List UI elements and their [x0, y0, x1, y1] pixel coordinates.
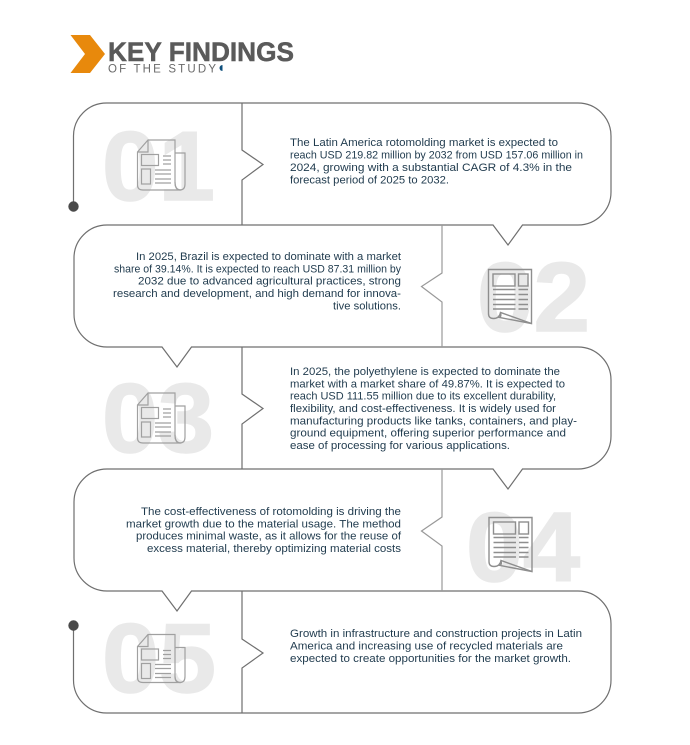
text block: finding 2: tive solutions.: [333, 300, 401, 312]
text block: finding 1: [290, 137, 583, 186]
icon: document 5: [138, 634, 185, 682]
icon: document 1: [138, 140, 185, 190]
text block: finding 4: produces minimal waste, as it allows for the reuse of: [136, 531, 402, 543]
number 01: 01: [102, 111, 215, 221]
text block: finding 2: 2032 due to advanced agricultural practices, strong: [138, 276, 401, 288]
text block: finding 4: [126, 506, 402, 555]
text block: finding 2: research and development, and high demand for innova-: [113, 288, 401, 300]
text block: finding 3: In 2025, the polyethylene is expected to dominate the: [290, 366, 560, 378]
text block: finding 4: The cost-effectiveness of rotomolding is driving the: [141, 506, 401, 518]
number 02: 02: [477, 242, 590, 352]
text block: finding 3: [290, 366, 577, 452]
serpentine outline: [74, 103, 611, 713]
text block: finding 3: reach USD 111.55 million due to its excellent durability,: [290, 391, 556, 403]
text block: finding 3: ease of processing for various applications.: [290, 440, 510, 452]
text block: finding 3: flexibility, and cost-effectiveness. It is widely used for: [290, 403, 556, 415]
number 05: 05: [102, 603, 216, 713]
number 04: 04: [466, 492, 580, 602]
text block: finding 2: [113, 251, 402, 312]
icon: document 3: [138, 393, 185, 443]
heading: key findings: KEY FINDINGS: [108, 37, 294, 67]
text block: finding 1: forecast period of 2025 to 2032.: [290, 174, 449, 186]
text block: finding 5: Growth in infrastructure and construction projects in Latin: [290, 628, 582, 640]
text block: finding 5: America and increasing use of recycled materials are: [290, 640, 563, 652]
text block: finding 2: share of 39.14%. It is expected to reach USD 87.31 million by: [114, 263, 401, 275]
subheading: of the study: OF THE STUDY: [108, 64, 216, 76]
text block: finding 2: In 2025, Brazil is expected to dominate with a market: [136, 251, 402, 263]
text block: finding 4: excess material, thereby optimizing material costs: [147, 543, 401, 555]
text block: finding 1: reach USD 219.82 million by 2032 from USD 157.06 million in: [290, 150, 583, 162]
text block: finding 3: ground equipment, offering superior performance and: [290, 428, 566, 440]
text block: finding 4: market growth due to the material usage. The method: [126, 518, 401, 530]
marker dot: first row: [68, 201, 79, 212]
text block: finding 5: [290, 628, 582, 665]
text block: finding 3: market with a market share of 49.87%. It is expected to: [290, 378, 565, 390]
text block: finding 5: expected to create opportunities for the market growth.: [290, 653, 571, 665]
icon: small blue marker: [220, 65, 222, 71]
icon: document 4: [489, 518, 532, 572]
text block: finding 3: manufacturing products like tanks, containers, and play-: [290, 415, 577, 427]
icon: document 2: [488, 270, 532, 324]
text block: finding 1: 2024, growing with a substantial CAGR of 4.3% in the: [290, 162, 572, 174]
number 03: 03: [102, 363, 214, 473]
marker dot: fifth row: [68, 620, 79, 631]
icon: orange chevron: [70, 35, 105, 73]
text block: finding 1: The Latin America rotomolding market is expected to: [290, 137, 558, 149]
title block: [70, 35, 294, 76]
